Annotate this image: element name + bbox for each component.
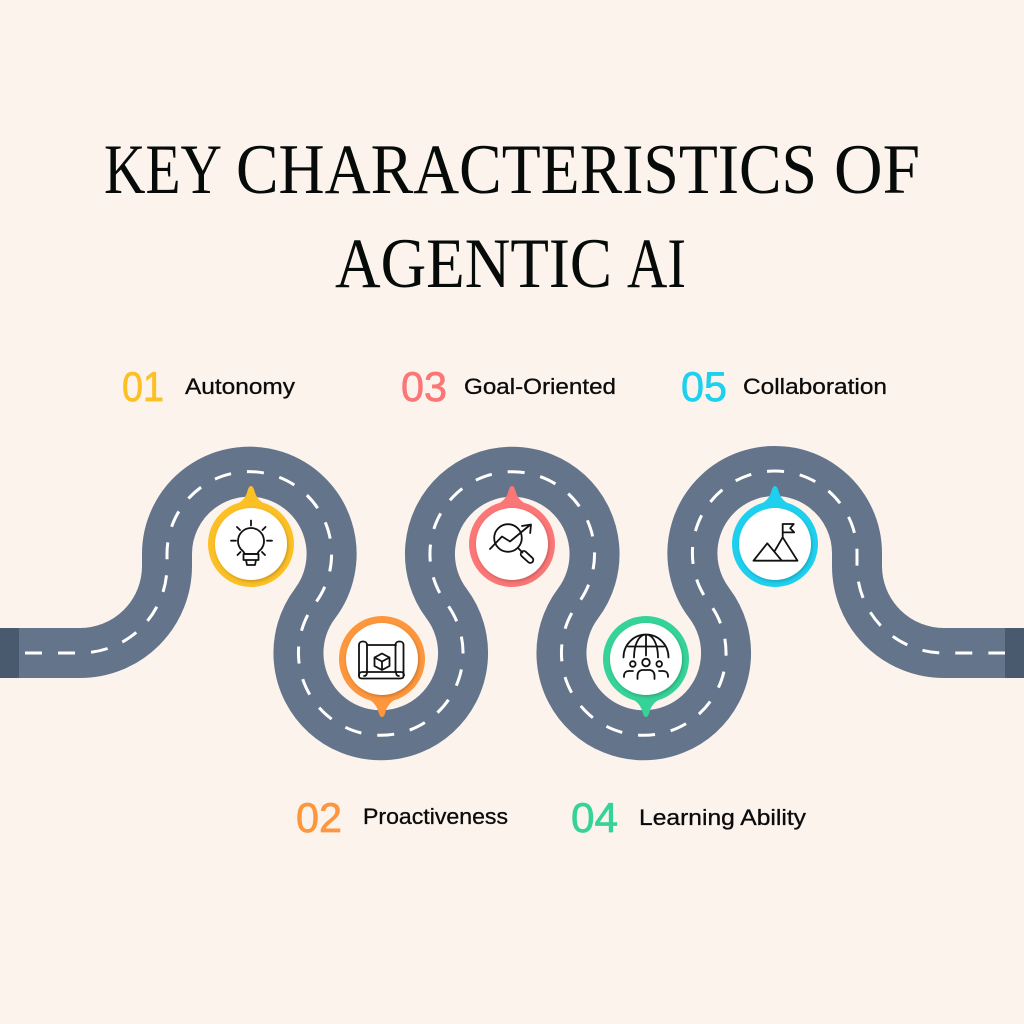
- label 03: Goal-Oriented: [464, 374, 616, 399]
- label 02: Proactiveness: [363, 804, 508, 829]
- icon: global team: [624, 634, 668, 679]
- label 05: Collaboration: [743, 374, 887, 399]
- title: AI: [627, 225, 686, 303]
- label 01: 01: [122, 363, 164, 410]
- icon: blueprint: [359, 642, 404, 678]
- pin 02: blueprint: [339, 616, 425, 717]
- icon: chart magnifier: [490, 524, 533, 563]
- title: KEY: [104, 131, 222, 209]
- label 03: 03: [401, 363, 447, 410]
- label 01: Autonomy: [185, 374, 295, 399]
- pin 05: mountain flag: [732, 486, 818, 587]
- label 02: [296, 794, 508, 841]
- label 02: 02: [296, 794, 342, 841]
- label 03: [401, 363, 616, 410]
- label 04: 04: [571, 794, 618, 841]
- label 05: [681, 363, 887, 410]
- pin 04: global team: [603, 616, 689, 717]
- title: [104, 131, 920, 303]
- icon: lightbulb: [231, 520, 272, 565]
- label 05: 05: [681, 363, 727, 410]
- label 01: [122, 363, 295, 410]
- winding road: [0, 471, 1024, 735]
- title: AGENTIC: [335, 225, 612, 303]
- title: OF: [834, 131, 920, 209]
- title: CHARACTERISTICS: [236, 131, 817, 209]
- label 04: Learning Ability: [639, 805, 806, 830]
- pin 03: chart magnifier: [469, 486, 555, 587]
- label 04: [571, 794, 806, 841]
- icon: mountain flag: [754, 524, 798, 561]
- pin 01: lightbulb: [208, 486, 294, 587]
